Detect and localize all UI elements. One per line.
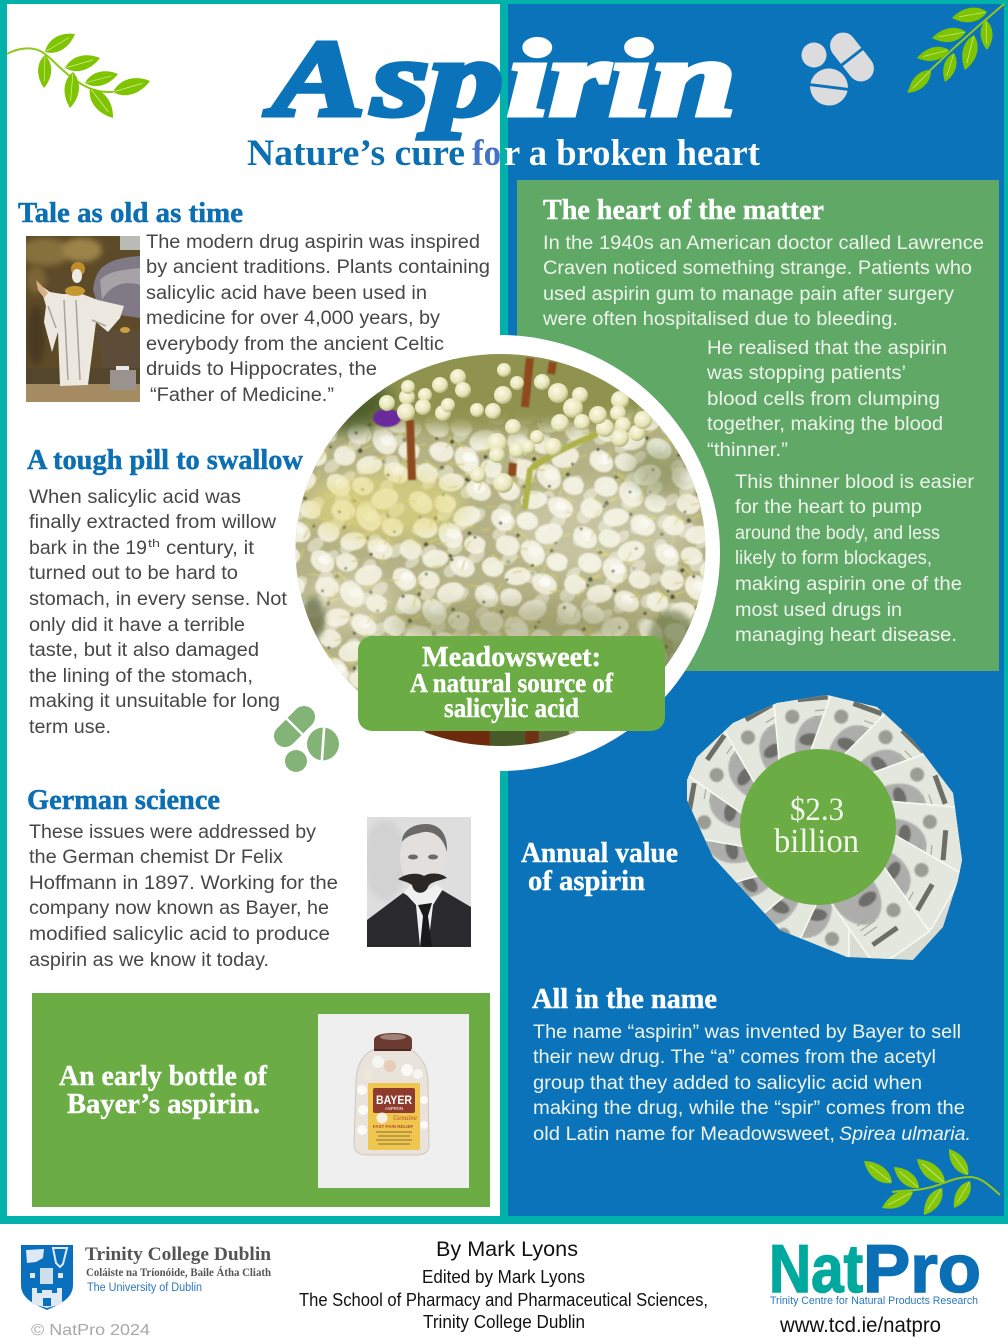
icon: leaf sprig top left	[7, 28, 152, 122]
text: heart of the matter paragraph one	[542, 233, 984, 330]
text: heart of the matter paragraph three: managing heart disease.	[735, 625, 957, 646]
panel: german science	[27, 784, 471, 971]
text: tough pill body: bark in the 19	[29, 538, 147, 559]
image: fan of banknotes	[687, 695, 962, 960]
panel: a tough pill to swallow	[27, 444, 340, 772]
icon: grey pills top right	[802, 27, 879, 108]
caption text: Meadowsweet:	[422, 641, 601, 673]
value circle: 2.3 billion	[740, 749, 896, 905]
caption text: A natural source of	[410, 668, 614, 698]
image: Bayer aspirin bottle	[318, 1014, 469, 1188]
text: tough pill body: th	[148, 538, 160, 550]
image: Bayer aspirin bottle: ASPIRIN	[385, 1106, 403, 1111]
footer: credits: The School of Pharmacy and Pharmaceutical Sciences,	[299, 1290, 708, 1310]
image: Bayer aspirin bottle: FAST PAIN RELIEF	[373, 1124, 413, 1129]
subtitle	[247, 133, 761, 174]
icon: Trinity shield	[21, 1245, 73, 1310]
panel: right blue column	[508, 4, 1004, 1216]
text: all in the name body: group that they added to salicylic acid when	[533, 1073, 922, 1094]
text: heart of the matter paragraph two: “thinner.”	[707, 440, 788, 461]
text: tale as old as time body	[146, 232, 490, 406]
panel: meadowsweet caption	[358, 636, 665, 731]
caption: early bottle: An early bottle of	[59, 1060, 267, 1092]
wordmark: Trinity College Dublin: Trinity College Dublin	[85, 1244, 271, 1265]
wordmark: Irish name: Coláiste na Tríonóide, Baile Átha Cliath	[86, 1265, 271, 1279]
text: all in the name body: The name “aspirin” was invented by Bayer to sell	[533, 1022, 961, 1043]
text: tough pill body: making it unsuitable for long	[29, 691, 280, 712]
text: heart of the matter paragraph three: for the heart to pump	[735, 497, 922, 518]
text: tough pill body: term use.	[29, 717, 111, 738]
footer: NatPro logo: Pro	[863, 1231, 981, 1307]
text: heart of the matter paragraph three: most used drugs in	[735, 600, 902, 621]
heading: all in the name: All in the name	[532, 983, 717, 1015]
text: heart of the matter paragraph two: blood cells from clumping	[707, 389, 940, 410]
footer: NatPro logo: Trinity Centre for Natural Products Research	[770, 1295, 978, 1307]
title: sp	[371, 18, 503, 139]
text: tough pill body: the lining of the stomach,	[29, 666, 253, 687]
image: Bayer aspirin bottle: Genuine	[393, 1114, 417, 1122]
text: tale as old as time body: salicylic acid have been used in	[146, 283, 427, 304]
text: tough pill body: turned out to be hard to	[29, 563, 238, 584]
image: druid illustration	[19, 236, 140, 402]
panel: tale as old as time	[18, 197, 490, 406]
white ring behind flower	[280, 335, 720, 771]
text: all in the name body	[533, 1022, 971, 1145]
text: tough pill body	[29, 487, 288, 738]
text: tough pill body: stomach, in every sense. Not	[29, 589, 288, 610]
wordmark: University of Dublin: The University of Dublin	[87, 1282, 202, 1294]
image: Bayer aspirin bottle: BAYER	[376, 1093, 412, 1107]
text: german science body: the German chemist Dr Felix	[29, 847, 284, 868]
text: heart of the matter paragraph two	[706, 338, 947, 461]
panel: heart of the matter	[542, 194, 984, 646]
footer: website: www.tcd.ie/natpro	[779, 1314, 941, 1337]
icon: green pills	[269, 701, 340, 772]
text: heart of the matter paragraph three: making aspirin one of the	[735, 574, 962, 595]
footer: credits: By Mark Lyons	[436, 1238, 578, 1261]
text: german science body: aspirin as we know it today.	[29, 950, 269, 971]
heading: tale as old as time: Tale as old as time	[18, 197, 243, 229]
footer: Trinity College Dublin logo	[21, 1244, 271, 1310]
heading: heart of the matter: The heart of the matter	[543, 194, 824, 226]
text: heart of the matter paragraph three: likely to form blockages,	[735, 548, 932, 569]
icon: leaf sprig bottom right	[860, 1145, 1000, 1219]
panel: all in the name	[532, 983, 971, 1145]
panel: heart of the matter green background	[517, 180, 999, 671]
text: tough pill body: century, it	[166, 538, 255, 559]
text: heart of the matter paragraph two: He realised that the aspirin	[707, 338, 947, 359]
heading: annual value of aspirin: of aspirin	[528, 865, 645, 897]
heading: annual value of aspirin	[521, 837, 678, 897]
text: tough pill body: finally extracted from willow	[29, 512, 276, 533]
text: heart of the matter paragraph two: was stopping patients’	[706, 363, 906, 384]
text: heart of the matter paragraph one: In the 1940s an American doctor called Lawrence	[543, 233, 984, 254]
text: tough pill body: When salicylic acid was	[29, 487, 241, 508]
footer: credits	[299, 1238, 708, 1332]
text: heart of the matter paragraph three: This thinner blood is easier	[735, 472, 975, 493]
heading: german science: German science	[27, 784, 220, 816]
text: german science body: company now known as Bayer, he	[29, 898, 329, 919]
text: tale as old as time body: “Father of Medicine.”	[150, 385, 334, 406]
text: tough pill body: taste, but it also damaged	[29, 640, 259, 661]
title: A	[264, 18, 365, 139]
text: tough pill body: only did it have a terrible	[29, 615, 245, 636]
footer: copyright: © NatPro 2024	[31, 1322, 150, 1339]
caption text: salicylic acid	[444, 693, 579, 723]
icon: leaf sprig top right	[904, 4, 1004, 98]
text: german science body: These issues were addressed by	[29, 822, 317, 843]
footer: credits: Edited by Mark Lyons	[422, 1267, 585, 1287]
text: tale as old as time body: druids to Hippocrates, the	[146, 359, 377, 380]
title: irin	[507, 18, 736, 139]
text: tale as old as time body: medicine for over 4,000 years, by	[146, 308, 441, 329]
text: tale as old as time body: everybody from the ancient Celtic	[146, 334, 444, 355]
text: all in the name body: old Latin name for Meadowsweet,	[533, 1124, 835, 1145]
subtitle: fo	[472, 133, 501, 174]
caption: early bottle	[59, 1060, 267, 1120]
footer: NatPro logo	[769, 1231, 981, 1307]
text: tale as old as time body: The modern drug aspirin was inspired	[146, 232, 480, 253]
title	[264, 18, 736, 139]
text: heart of the matter paragraph two: together, making the blood	[707, 414, 943, 435]
heading: a tough pill to swallow: A tough pill to swallow	[27, 444, 303, 476]
subtitle: r a broken heart	[504, 133, 761, 174]
bottle panel background	[32, 993, 490, 1207]
caption background	[358, 636, 665, 731]
value circle: 2.3 billion: billion	[774, 823, 859, 860]
text: heart of the matter paragraph one: used aspirin gum to manage pain after surgery	[543, 284, 955, 305]
text: heart of the matter paragraph three	[735, 472, 975, 646]
image: portrait of Felix Hoffmann	[363, 817, 471, 947]
heading: annual value of aspirin: Annual value	[521, 837, 678, 869]
text: german science body	[29, 822, 338, 971]
text: all in the name body: their new drug. The “a” comes from the acetyl	[533, 1047, 936, 1068]
footer: credits: Trinity College Dublin	[423, 1312, 585, 1332]
text: heart of the matter paragraph one: Craven noticed something strange. Patients who	[543, 258, 972, 279]
text: tale as old as time body: by ancient traditions. Plants containing	[146, 257, 490, 278]
text: heart of the matter paragraph three: around the body, and less	[735, 523, 940, 544]
image: meadowsweet flower circle	[290, 339, 710, 750]
value circle: 2.3 billion: $2.3	[790, 792, 844, 828]
text: all in the name body: Spirea ulmaria.	[839, 1124, 971, 1145]
text: german science body: modified salicylic acid to produce	[29, 924, 330, 945]
panel: annual value	[521, 695, 962, 960]
footer: NatPro logo: Nat	[769, 1231, 863, 1307]
text: all in the name body: making the drug, while the “spir” comes from the	[533, 1098, 965, 1119]
panel: early bottle of Bayer's aspirin	[32, 993, 490, 1207]
text: heart of the matter paragraph one: were often hospitalised due to bleeding.	[542, 309, 898, 330]
caption: early bottle: Bayer’s aspirin.	[67, 1088, 260, 1120]
caption text	[410, 641, 614, 723]
text: german science body: Hoffmann in 1897. Working for the	[29, 873, 338, 894]
panel: left white column	[7, 4, 500, 1216]
subtitle: Nature’s cure	[247, 133, 465, 174]
